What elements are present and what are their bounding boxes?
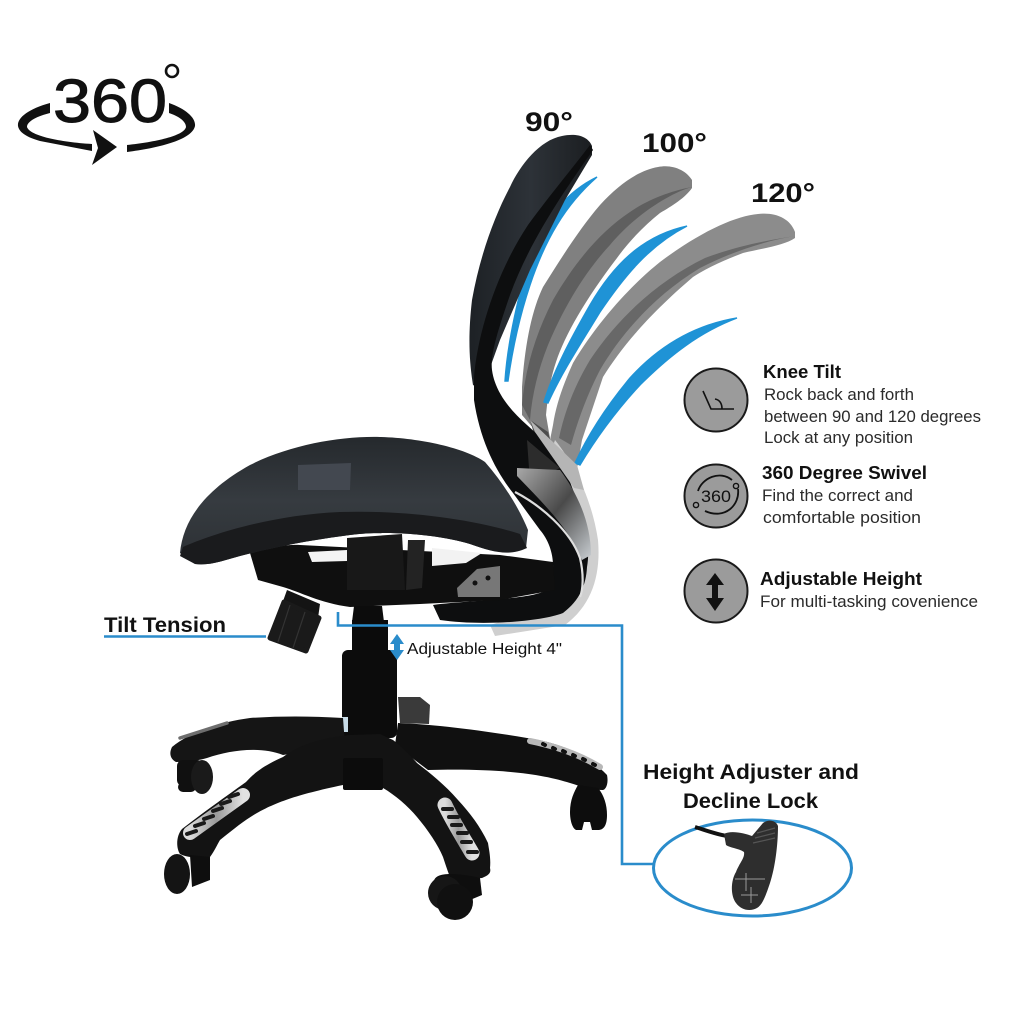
text: knee tilt: Lock at any position [764,428,913,447]
feature: 360 degree swivel [684,463,927,528]
text: knee tilt [763,362,981,447]
S-shaped frame [433,145,593,623]
heading: height adjuster and decline lock: Decline Lock [683,790,818,813]
text: swivel [762,463,927,527]
gas lift column [342,620,397,738]
icon: knee tilt [684,368,748,432]
leader line: tilt tension [104,635,266,638]
label: 120 degrees: 120° [751,178,815,208]
ghost frame behind seat [490,440,599,636]
seat underside mechanism [250,534,555,622]
text: adjustable height [760,569,978,611]
text: adjustable height: Adjustable Height [760,569,922,589]
leader line: height adjuster [338,612,654,864]
callout ellipse: height adjuster [654,820,852,916]
icon: up-down arrow [684,560,748,622]
backrest at 90 degrees [469,135,592,390]
base tread pads [180,723,600,853]
text: swivel: Find the correct and [762,486,913,505]
blue lumbar arc: 100 degrees [544,226,687,403]
text: knee tilt: Knee Tilt [763,362,841,382]
label: tilt tension: Tilt Tension [104,614,226,637]
text: knee tilt: Rock back and forth [764,385,914,404]
five-star base [170,697,608,879]
label: 100 degrees: 100° [642,128,707,158]
blue lumbar arc: 90 degrees [505,177,597,381]
heading: height adjuster and decline lock [643,761,859,813]
feature: adjustable height [684,560,978,622]
tilt tension knob [270,590,320,651]
heading: height adjuster and decline lock: Height Adjuster and [643,761,859,784]
chair [164,135,608,920]
icon: 360 degree rotation [18,65,195,165]
icon: 360 degree rotation: 360 [53,67,167,135]
label: 90 degrees: 90° [525,107,573,137]
text: swivel: comfortable position [763,508,921,527]
backrest ghost: 100 degrees [522,166,692,480]
icon: swivel [684,464,748,528]
text: swivel: 360 Degree Swivel [762,463,927,483]
height lock lever image [695,821,778,910]
text: knee tilt: between 90 and 120 degrees [764,407,981,426]
feature: knee tilt [684,362,981,447]
blue lumbar arc: 120 degrees [575,318,737,465]
icon: blue height arrow [390,634,404,660]
casters [164,760,607,920]
text: adjustable height: For multi-tasking covenience [760,592,978,611]
label: adjustable height 4 inches: Adjustable Height 4" [407,641,562,658]
backrest ghost: 120 degrees [548,214,795,480]
seat cushion [180,437,528,564]
icon: swivel: 360 [701,487,731,506]
